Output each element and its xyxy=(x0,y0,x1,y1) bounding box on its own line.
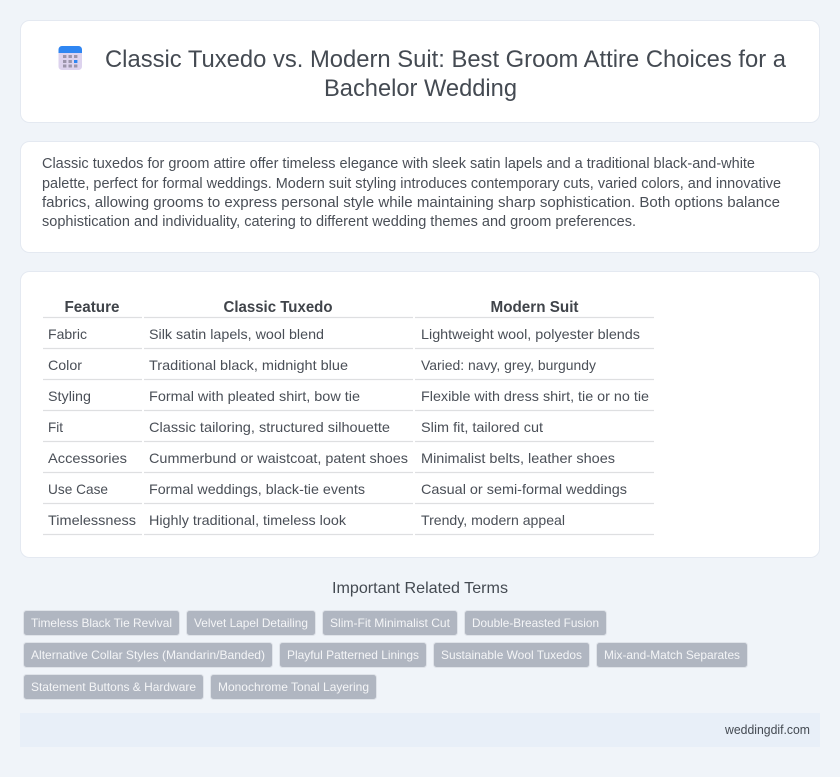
text block: introduction: sophistication and individuality, catering to different wedding themes and groom preferences. xyxy=(42,214,636,230)
related term tags: Slim-Fit Minimalist Cut xyxy=(330,616,451,630)
table rows xyxy=(43,318,654,534)
text block: introduction: fabrics, allowing grooms to express personal style while maintaining sharp sophistication. Both options balance xyxy=(42,195,780,211)
panel: header xyxy=(20,20,820,122)
related term tags: Sustainable Wool Tuxedos xyxy=(441,648,582,662)
table rows: Fit xyxy=(48,419,63,435)
title xyxy=(105,46,787,102)
related term tags xyxy=(24,610,748,700)
table rows: Color xyxy=(48,357,82,373)
table rows: Fabric xyxy=(48,326,87,342)
table header: Classic Tuxedo xyxy=(224,299,333,316)
related term tags: Statement Buttons & Hardware xyxy=(31,680,196,694)
related term tags: Monochrome Tonal Layering xyxy=(218,680,369,694)
table rows: Styling xyxy=(48,388,91,404)
table header: Modern Suit xyxy=(490,299,579,316)
text block: introduction: palette, perfect for formal weddings. Modern suit styling introduces contemporary cuts, varied colors, and innovative xyxy=(42,176,781,192)
table rows: Varied: navy, grey, burgundy xyxy=(421,357,596,373)
table rows: Cummerbund or waistcoat, patent shoes xyxy=(149,450,408,466)
related term tags: Velvet Lapel Detailing xyxy=(194,616,308,630)
text block: introduction xyxy=(42,156,781,230)
table rows: Flexible with dress shirt, tie or no tie xyxy=(421,388,649,404)
table rows: Formal weddings, black-tie events xyxy=(149,481,365,497)
table rows: Silk satin lapels, wool blend xyxy=(149,326,324,342)
related term tags: Double-Breasted Fusion xyxy=(472,616,599,630)
table rows: Slim fit, tailored cut xyxy=(421,419,543,435)
title: Classic Tuxedo vs. Modern Suit: Best Groom Attire Choices for a xyxy=(105,46,787,73)
table rows: Casual or semi-formal weddings xyxy=(421,481,627,497)
table rows: Highly traditional, timeless look xyxy=(149,512,347,528)
table rows: Trendy, modern appeal xyxy=(421,512,565,528)
table rows: Traditional black, midnight blue xyxy=(149,357,348,373)
footer: weddingdif.com xyxy=(724,723,810,737)
text block: introduction: Classic tuxedos for groom attire offer timeless elegance with sleek satin lapels and a traditional black-and-white xyxy=(42,156,755,172)
related term tags: Mix-and-Match Separates xyxy=(604,648,740,662)
title: Bachelor Wedding xyxy=(324,75,517,102)
table rows: Classic tailoring, structured silhouette xyxy=(149,419,390,435)
table rows: Accessories xyxy=(48,450,127,466)
table rows: Timelessness xyxy=(48,512,136,528)
heading: related terms: Important Related Terms xyxy=(332,580,508,597)
icon: calendar xyxy=(58,46,82,70)
related term tags: Timeless Black Tie Revival xyxy=(31,616,172,630)
related term tags: Playful Patterned Linings xyxy=(287,648,419,662)
footer xyxy=(20,713,820,747)
panel: introduction xyxy=(20,142,820,252)
table rows: Minimalist belts, leather shoes xyxy=(421,450,615,466)
table header: Feature xyxy=(64,299,120,316)
table rows: Use Case xyxy=(48,481,108,497)
panel: comparison table xyxy=(20,272,820,558)
table rows: Formal with pleated shirt, bow tie xyxy=(149,388,360,404)
table header xyxy=(64,299,579,316)
related term tags: Alternative Collar Styles (Mandarin/Banded) xyxy=(31,648,265,662)
table rows: Lightweight wool, polyester blends xyxy=(421,326,640,342)
